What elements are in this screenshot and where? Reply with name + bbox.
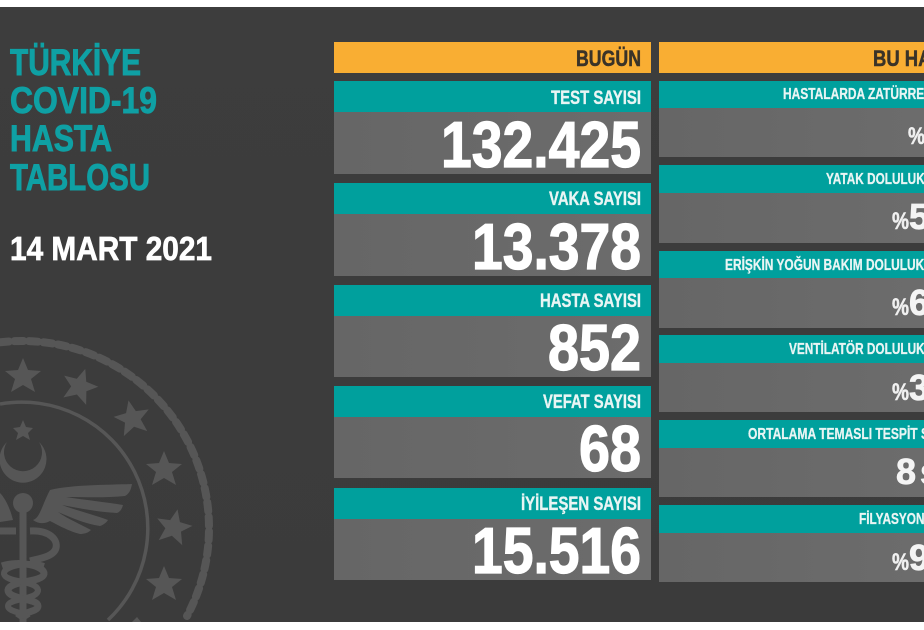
panel: test sayısı (334, 81, 651, 181)
header: BUGÜN: BUGÜN (576, 46, 641, 71)
panel: vaka sayısı: 13.378 (472, 210, 641, 283)
panel: vefat sayısı (334, 386, 651, 485)
panel: vaka sayısı (334, 183, 651, 283)
panel: filyasyon oranı: % (892, 549, 909, 576)
panel: yatak doluluk oranı (659, 165, 924, 243)
panel: vaka sayısı: VAKA SAYISI (549, 188, 641, 210)
emblem watermark (0, 341, 209, 622)
panel: iyileşen sayısı (334, 488, 651, 587)
panel: ortalama temaslı tespit süresi: 8 (896, 451, 916, 492)
panel: test sayısı: TEST SAYISI (551, 87, 641, 109)
panel: erişkin yoğun bakım doluluk oranı: % (892, 294, 909, 321)
panel: erişkin yoğun bakım doluluk oranı (659, 251, 924, 328)
panel: vefat sayısı: VEFAT SAYISI (543, 391, 641, 413)
panel: filyasyon oranı (659, 505, 924, 582)
panel: iyileşen sayısı: 15.516 (472, 514, 641, 587)
panel: hasta sayısı: 852 (548, 311, 641, 384)
panel: hasta sayısı (334, 285, 651, 384)
header: BU HAFTA (659, 42, 924, 73)
panel: test sayısı: 132.425 (441, 108, 641, 181)
panel: hastalarda zatürre oranı (659, 81, 924, 157)
title: TABLOSU (10, 157, 150, 198)
panel: vefat sayısı: 68 (579, 412, 641, 485)
panel: ventilatör doluluk oranı: % (892, 379, 909, 406)
panel: ventilatör doluluk oranı (659, 335, 924, 412)
title: HASTA (10, 118, 112, 159)
date: 14 MART 2021 (10, 230, 212, 267)
title: COVID-19 (10, 80, 157, 121)
panel: hasta sayısı: HASTA SAYISI (540, 290, 641, 312)
panel: ortalama temaslı tespit süresi (659, 420, 924, 497)
header: BUGÜN (334, 42, 651, 73)
panel: yatak doluluk oranı: % (892, 208, 909, 235)
title: TÜRKİYE (10, 42, 141, 83)
title (10, 42, 157, 198)
panel: iyileşen sayısı: İYİLEŞEN SAYISI (521, 492, 641, 515)
